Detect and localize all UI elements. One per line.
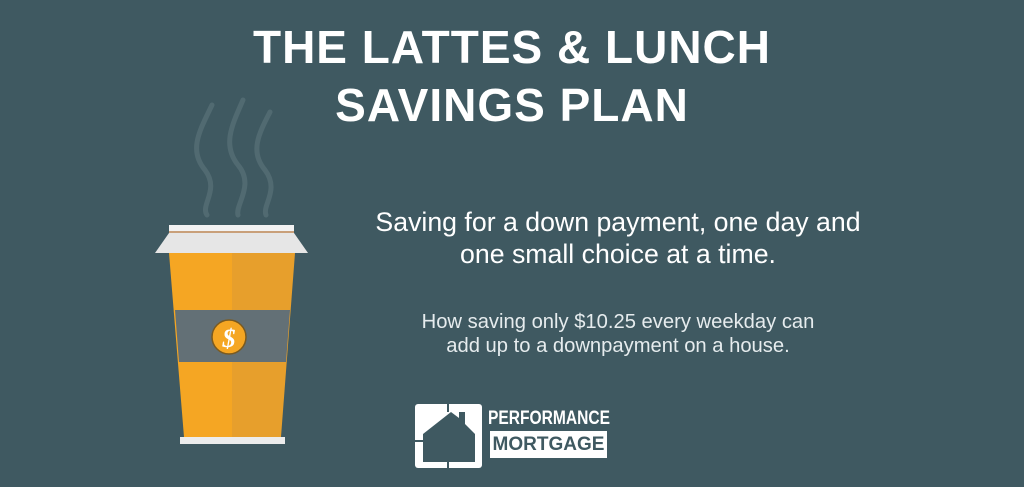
subtitle: one small choice at a time. <box>460 239 776 269</box>
title: THE LATTES & LUNCH <box>253 21 771 73</box>
logo: PERFORMANCE <box>488 408 610 429</box>
description: How saving only $10.25 every weekday can <box>422 311 814 333</box>
title: SAVINGS PLAN <box>335 79 689 131</box>
subtitle <box>375 207 861 269</box>
icon: coffee cup with steam: $ <box>222 324 236 353</box>
icon: coffee cup with steam <box>155 98 308 444</box>
subtitle: Saving for a down payment, one day and <box>375 207 861 237</box>
title <box>253 21 771 131</box>
description <box>422 311 814 357</box>
description: add up to a downpayment on a house. <box>446 335 790 357</box>
logo: MORTGAGE <box>493 434 604 455</box>
logo <box>415 404 610 468</box>
